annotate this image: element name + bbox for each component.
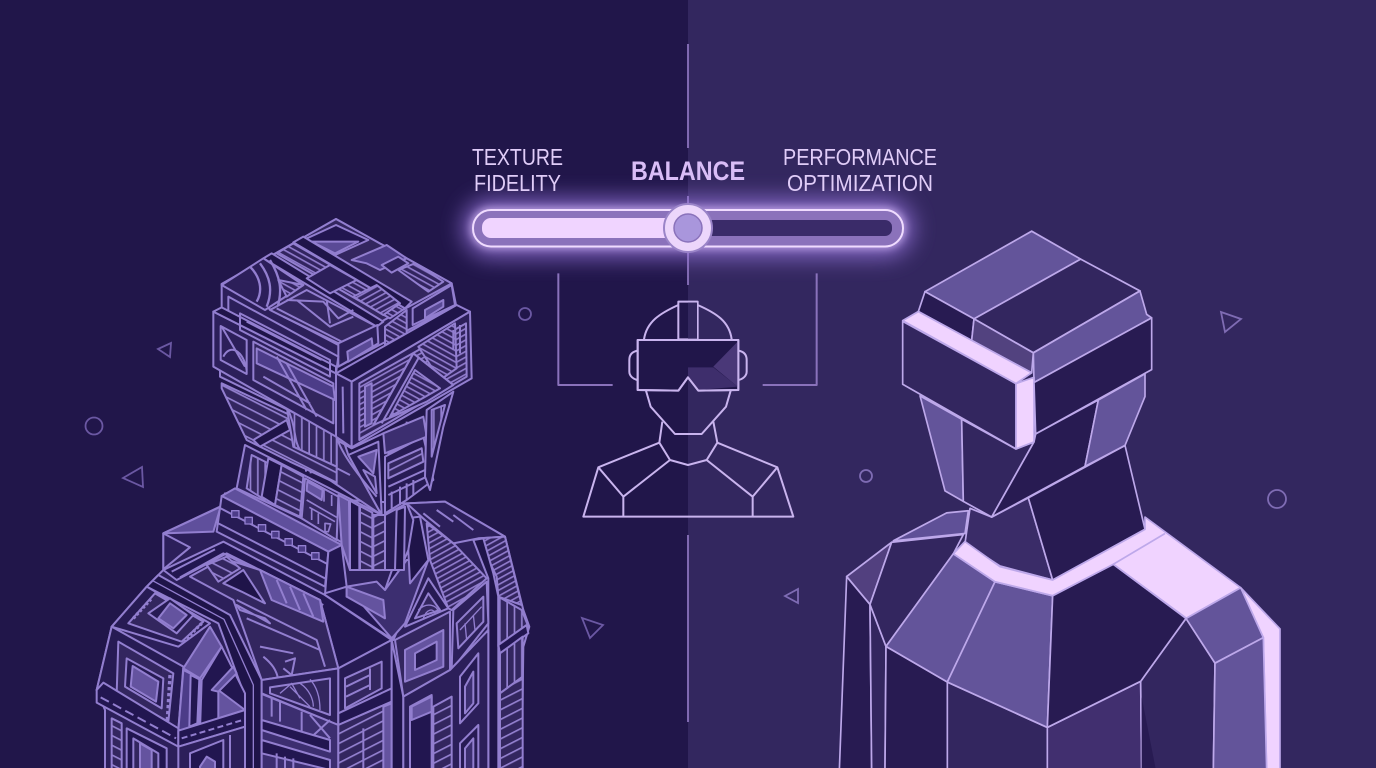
label: performance optimization: PERFORMANCE (783, 144, 937, 170)
chest panel centre (262, 668, 338, 725)
slider track (473, 210, 903, 246)
helmet (644, 305, 732, 339)
avatar arm and shoulder left (839, 511, 968, 768)
ears (629, 351, 747, 380)
avatar face (920, 374, 1145, 517)
neck (659, 422, 717, 465)
shoulder band upper (163, 542, 392, 668)
label: texture fidelity: FIDELITY (474, 170, 561, 196)
slider knob (664, 204, 712, 252)
headset visor (638, 340, 738, 391)
corner brackets (558, 273, 817, 385)
jaw (646, 391, 731, 434)
left shoulder (112, 587, 210, 647)
avatar head and visor (213, 219, 472, 447)
avatar neck (237, 420, 433, 570)
collar strip (222, 488, 342, 552)
slider empty side (695, 220, 892, 236)
slider filled side (482, 218, 682, 238)
right shoulder (427, 523, 487, 610)
avatar lower face (222, 383, 453, 497)
slider (462, 198, 914, 258)
avatar VR visor (903, 312, 1152, 449)
centre VR user icon (558, 273, 817, 517)
decorative shapes: left (86, 308, 603, 638)
chest panel right (338, 640, 392, 725)
avatar torso (885, 554, 1215, 768)
breast panel left (190, 558, 338, 680)
slider glow (462, 198, 914, 258)
label: performance optimization: OPTIMIZATION (787, 170, 933, 196)
figure: highly detailed textured avatar (97, 219, 529, 768)
vertical centre divider (687, 44, 689, 722)
avatar highlighted collar and arm (953, 517, 1280, 768)
label: balance: BALANCE (631, 156, 745, 186)
avatar neck (965, 445, 1145, 580)
avatar body (97, 488, 529, 768)
figure: low-poly optimized avatar (839, 231, 1280, 768)
upper arm panel (97, 627, 183, 730)
arm cuff (97, 683, 178, 747)
shoulders (583, 443, 793, 517)
decorative shapes: right (785, 312, 1286, 603)
main shoulder band (147, 575, 262, 768)
label: texture fidelity: TEXTURE (472, 144, 563, 170)
panel: left background (0, 0, 688, 768)
avatar head top (918, 231, 1152, 383)
panel: right background (688, 0, 1376, 768)
